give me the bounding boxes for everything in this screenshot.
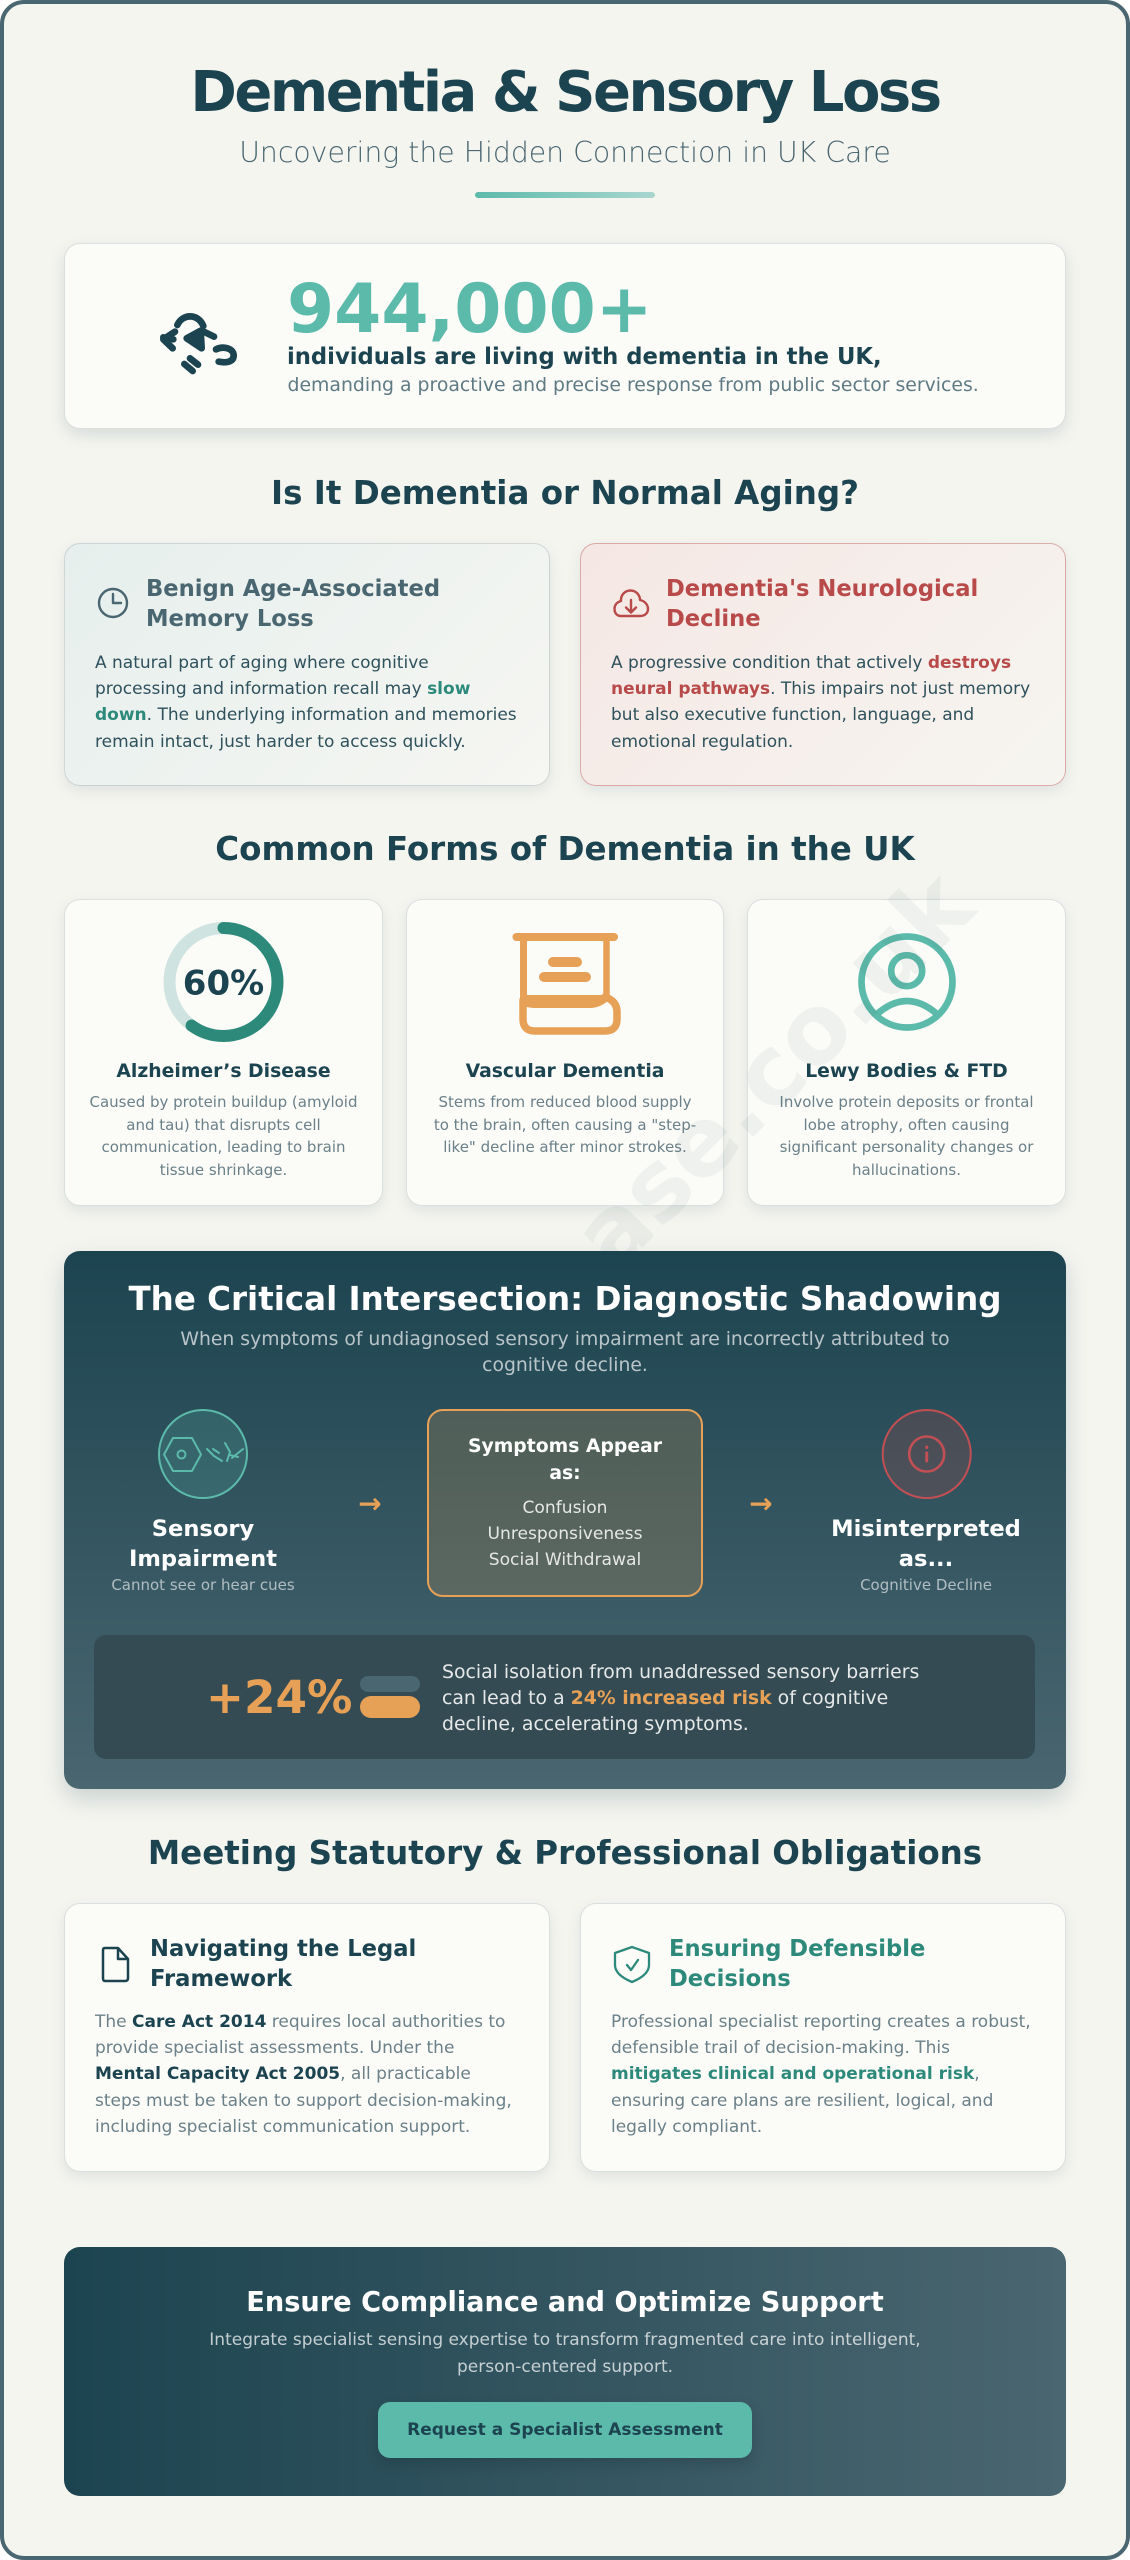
icon: shield (614, 1946, 650, 1984)
text: benign memory loss: remain intact, just harder to access quickly. (95, 732, 466, 752)
text: neurological decline: neural pathways. This impairs not just memory (611, 679, 1030, 699)
text: benign memory loss (95, 652, 517, 752)
label: sensory impairment (129, 1516, 277, 1572)
text: defensible decisions: Professional specialist reporting creates a robust, (611, 2012, 1031, 2032)
panel: headline statistic (64, 243, 1066, 429)
heading: common forms: Common Forms of Dementia in the UK (215, 830, 915, 868)
heading: dementia or aging: Is It Dementia or Normal Aging? (271, 474, 859, 512)
text: defensible decisions: ensuring care plans are resilient, logical, and (611, 2091, 993, 2111)
text: legal framework: including specialist communication support. (95, 2117, 470, 2137)
button: request assessment: Request a Specialist Assessment (407, 2420, 723, 2440)
arrow: sensory to symptoms: → (358, 1487, 382, 1520)
text: legal framework: The Care Act 2014 requires local authorities to (95, 2012, 505, 2032)
text: defensible decisions: mitigates clinical and operational risk, (611, 2064, 980, 2084)
panel: defensible decisions (580, 1902, 1066, 2172)
text: benign memory loss: processing and information recall may slow (95, 679, 470, 699)
stat: plus 24 percent: +24% (206, 1670, 352, 1724)
panel: vascular (406, 898, 724, 1206)
label: misinterpreted: as... (899, 1546, 953, 1572)
text: lewy bodies (779, 1093, 1034, 1179)
text: lewy bodies: hallucinations. (852, 1161, 961, 1179)
list: symptoms: Confusion (522, 1498, 608, 1518)
text: call to action: Integrate specialist sensing expertise to transform fragmented care into intelligent, (209, 2330, 921, 2350)
caption: sensory impairment: Cannot see or hear cues (111, 1576, 295, 1594)
statistic caption: individuals are living with dementia in the UK, (287, 344, 882, 370)
panel: call to action (64, 2247, 1066, 2496)
icon: clock (98, 588, 128, 618)
list: symptoms: Social Withdrawal (489, 1550, 641, 1570)
text: alzheimer's: tissue shrinkage. (160, 1161, 287, 1179)
arrow: symptoms to misinterpretation: → (749, 1487, 773, 1520)
button: request assessment (378, 2402, 752, 2458)
text: lewy bodies: significant personality changes or (780, 1138, 1033, 1156)
panel: alzheimer's (64, 898, 383, 1206)
statistic subtext: demanding a proactive and precise response from public sector services. (288, 375, 979, 396)
icon: vascular scroll (512, 933, 621, 1035)
text: legal framework (94, 2012, 512, 2137)
text: benign memory loss: down. The underlying information and memories (95, 705, 517, 725)
text: benign memory loss: A natural part of aging where cognitive (95, 652, 429, 672)
text: vascular: Stems from reduced blood supply (438, 1093, 692, 1111)
text: lewy bodies: Involve protein deposits or frontal (779, 1093, 1034, 1111)
chart: 60 percent donut: 60% (183, 964, 264, 1004)
box: symptoms (427, 1409, 703, 1597)
name: vascular: Vascular Dementia (466, 1060, 664, 1082)
list: symptoms: Unresponsiveness (487, 1524, 642, 1544)
text: shadowing definition: When symptoms of undiagnosed sensory impairment are incorrectly attributed to (180, 1328, 950, 1350)
heading: defensible decisions (669, 1936, 925, 1992)
heading: benign memory loss: Memory Loss (146, 606, 314, 632)
heading: diagnostic shadowing: The Critical Intersection: Diagnostic Shadowing (129, 1280, 1001, 1318)
watermark: ase.co.uk (551, 848, 996, 1292)
text: legal framework: Mental Capacity Act 2005, all practicable (95, 2064, 471, 2084)
text: vascular: like" decline after minor strokes. (443, 1138, 687, 1156)
heading: defensible decisions: Ensuring Defensible (669, 1936, 925, 1962)
heading: legal framework (150, 1936, 416, 1992)
panel: legal framework (64, 1902, 550, 2172)
icon: misinterpreted warning (882, 1409, 972, 1499)
text: legal framework: provide specialist assessments. Under the (95, 2038, 454, 2058)
list: symptoms (487, 1498, 642, 1570)
heading: neurological decline (666, 576, 978, 632)
icon: sensory impairment (158, 1409, 248, 1499)
text: alzheimer's: communication, leading to brain (102, 1138, 346, 1156)
panel: diagnostic shadowing (64, 1251, 1066, 1789)
header accent bar (475, 192, 655, 198)
caption: misinterpreted: Cognitive Decline (860, 1576, 992, 1594)
heading: legal framework: Navigating the Legal (150, 1936, 416, 1962)
text: defensible decisions: defensible trail of decision-making. This (611, 2038, 950, 2058)
text: call to action (209, 2330, 921, 2377)
label: misinterpreted (831, 1516, 1021, 1572)
heading: obligations: Meeting Statutory & Professional Obligations (148, 1834, 982, 1872)
heading: neurological decline: Decline (666, 606, 761, 632)
icon: cloud down (613, 589, 650, 618)
panel: increased risk (94, 1635, 1035, 1759)
icon: brain fragments (160, 313, 237, 374)
heading: defensible decisions: Decisions (669, 1966, 791, 1992)
text: increased risk: Social isolation from unaddressed sensory barriers (442, 1662, 919, 1682)
box heading: symptoms: as: (549, 1463, 581, 1484)
icon: document (102, 1946, 130, 1982)
label: sensory impairment: Impairment (129, 1546, 277, 1572)
label: misinterpreted: Misinterpreted (831, 1516, 1021, 1542)
name: alzheimer's: Alzheimer’s Disease (116, 1060, 331, 1082)
text: alzheimer's: Caused by protein buildup (amyloid (89, 1093, 358, 1111)
title: Dementia & Sensory Loss (190, 60, 940, 125)
heading: benign memory loss: Benign Age-Associated (146, 576, 440, 602)
panel: neurological decline (580, 543, 1066, 786)
heading: benign memory loss (146, 576, 440, 632)
text: shadowing definition (180, 1328, 950, 1376)
subtitle: Uncovering the Hidden Connection in UK Care (239, 136, 891, 168)
chart: risk bars (360, 1676, 420, 1718)
text: call to action: person-centered support. (457, 2357, 673, 2377)
box heading: symptoms: Symptoms Appear (468, 1436, 662, 1457)
panel: benign memory loss (64, 543, 550, 786)
box heading: symptoms (468, 1436, 662, 1484)
label: sensory impairment: Sensory (152, 1516, 254, 1542)
text: vascular: to the brain, often causing a "step- (434, 1116, 696, 1134)
text: defensible decisions: legally compliant. (611, 2117, 762, 2137)
heading: neurological decline: Dementia's Neurological (666, 576, 978, 602)
text: lewy bodies: lobe atrophy, often causing (804, 1116, 1009, 1134)
text: increased risk: can lead to a 24% increased risk of cognitive (442, 1688, 888, 1709)
icon: person (858, 933, 956, 1031)
name: lewy bodies: Lewy Bodies & FTD (805, 1060, 1008, 1082)
big number: 944,000+ (287, 268, 653, 348)
text: alzheimer's: and tau) that disrupts cell (126, 1116, 321, 1134)
text: legal framework: steps must be taken to support decision-making, (95, 2091, 512, 2111)
text: alzheimer's (89, 1093, 358, 1179)
text: increased risk: decline, accelerating symptoms. (442, 1714, 749, 1735)
text: neurological decline: but also executive function, language, and (611, 705, 974, 725)
text: vascular (434, 1093, 696, 1156)
text: shadowing definition: cognitive decline. (482, 1355, 648, 1376)
text: neurological decline: A progressive condition that actively destroys (611, 652, 1011, 672)
panel: lewy bodies (747, 898, 1066, 1206)
text: defensible decisions (611, 2012, 1031, 2137)
chart: 60 percent donut (164, 922, 284, 1042)
text: neurological decline: emotional regulation. (611, 732, 793, 752)
text: neurological decline (611, 652, 1030, 752)
heading: legal framework: Framework (150, 1966, 292, 1992)
heading: call to action: Ensure Compliance and Optimize Support (246, 2287, 884, 2318)
text: increased risk (442, 1662, 919, 1735)
